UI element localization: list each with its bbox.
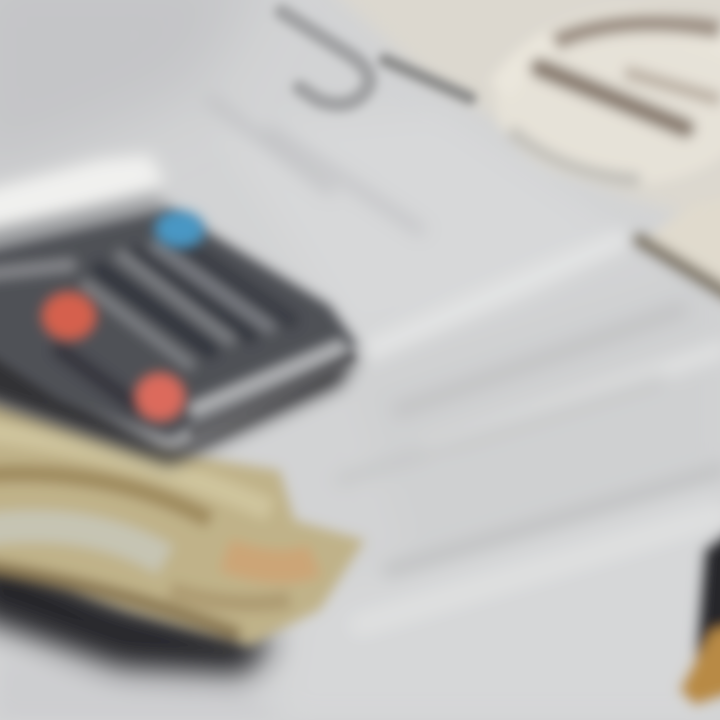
white paper behind calculator bbox=[0, 155, 165, 240]
red button left bbox=[42, 292, 96, 340]
calculator bbox=[0, 208, 360, 465]
round object at top right bbox=[495, 15, 720, 185]
paper lines bbox=[229, 116, 720, 576]
money stack bbox=[0, 395, 365, 645]
calculator keys bbox=[0, 240, 290, 405]
calculator shadow bbox=[0, 325, 360, 465]
calculator body bbox=[0, 208, 358, 440]
money stack shadow bbox=[0, 535, 275, 675]
calculator light edge bbox=[190, 345, 345, 412]
cream object at right edge bbox=[640, 195, 720, 295]
dark object at bottom right bbox=[680, 525, 720, 705]
red button bottom bbox=[135, 373, 185, 421]
blue button bbox=[155, 210, 205, 248]
icon: paper clip or hook at top bbox=[282, 12, 470, 104]
gray edge above calculator bbox=[0, 195, 170, 265]
